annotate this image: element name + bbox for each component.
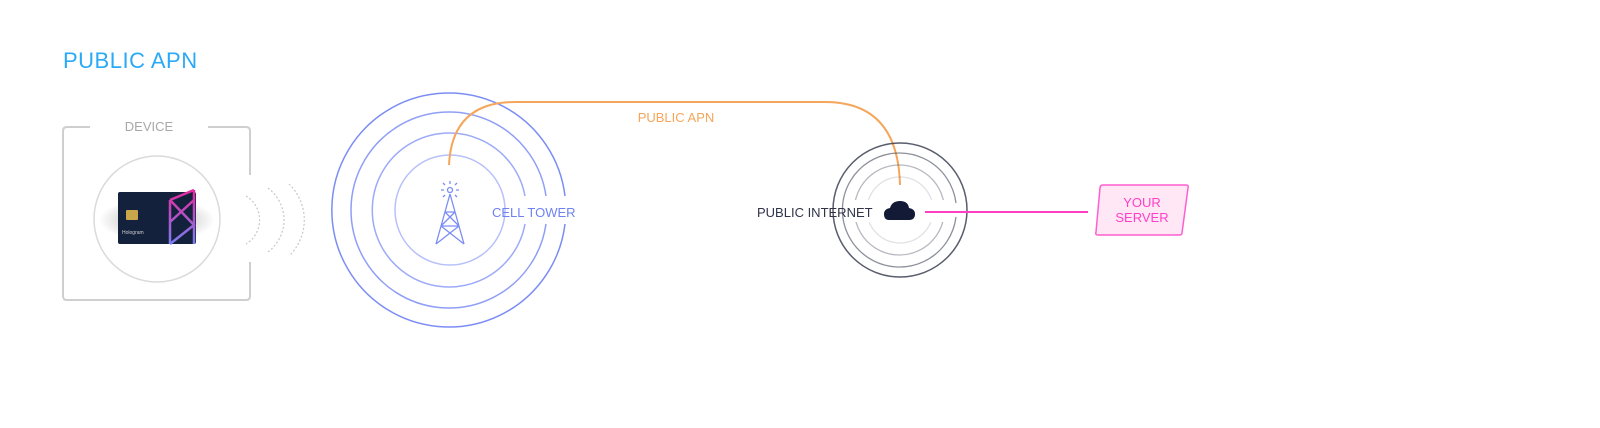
server box: SERVER (1115, 210, 1169, 225)
icon: SIM card (118, 190, 196, 244)
icon: signal waves (246, 184, 304, 256)
server box (1096, 185, 1188, 235)
public internet label: PUBLIC INTERNET (757, 205, 873, 220)
internet circles (833, 143, 967, 277)
pink connector (925, 211, 1088, 213)
icon: cloud (884, 201, 915, 220)
cell tower circles (332, 93, 565, 327)
title: PUBLIC APN (63, 48, 198, 73)
icon: cell tower (436, 181, 464, 244)
server box: YOUR (1123, 195, 1161, 210)
device circle (94, 156, 220, 282)
device label: DEVICE (125, 119, 174, 134)
panel: device (63, 119, 250, 300)
cell tower label: CELL TOWER (492, 205, 576, 220)
public apn path label: PUBLIC APN (638, 110, 714, 125)
icon: SIM card: Hologram (122, 230, 144, 236)
arrow: public APN path (449, 102, 900, 185)
